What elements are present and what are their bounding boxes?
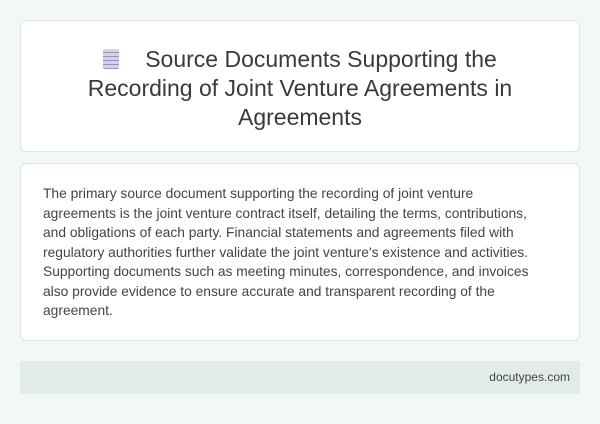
title: Source Documents Supporting the Recording of Joint Venture Agreements in Agreements: [88, 46, 512, 130]
title panel: [20, 20, 580, 152]
description text: The primary source document supporting the recording of joint venture agreements is the joint venture contract itself, detailing the terms, contributions, and obligations of each party. Financial statements and agreements filed with regulatory authorities further validate the joint venture's existence and activities. Supporting documents such as meeting minutes, correspondence, and invoices also provide evidence to ensure accurate and transparent recording of the agreement.: [43, 186, 528, 318]
footer: [20, 361, 580, 394]
icon: document: [103, 49, 119, 69]
description panel: [20, 163, 580, 341]
footer text: docutypes.com: [489, 370, 570, 384]
